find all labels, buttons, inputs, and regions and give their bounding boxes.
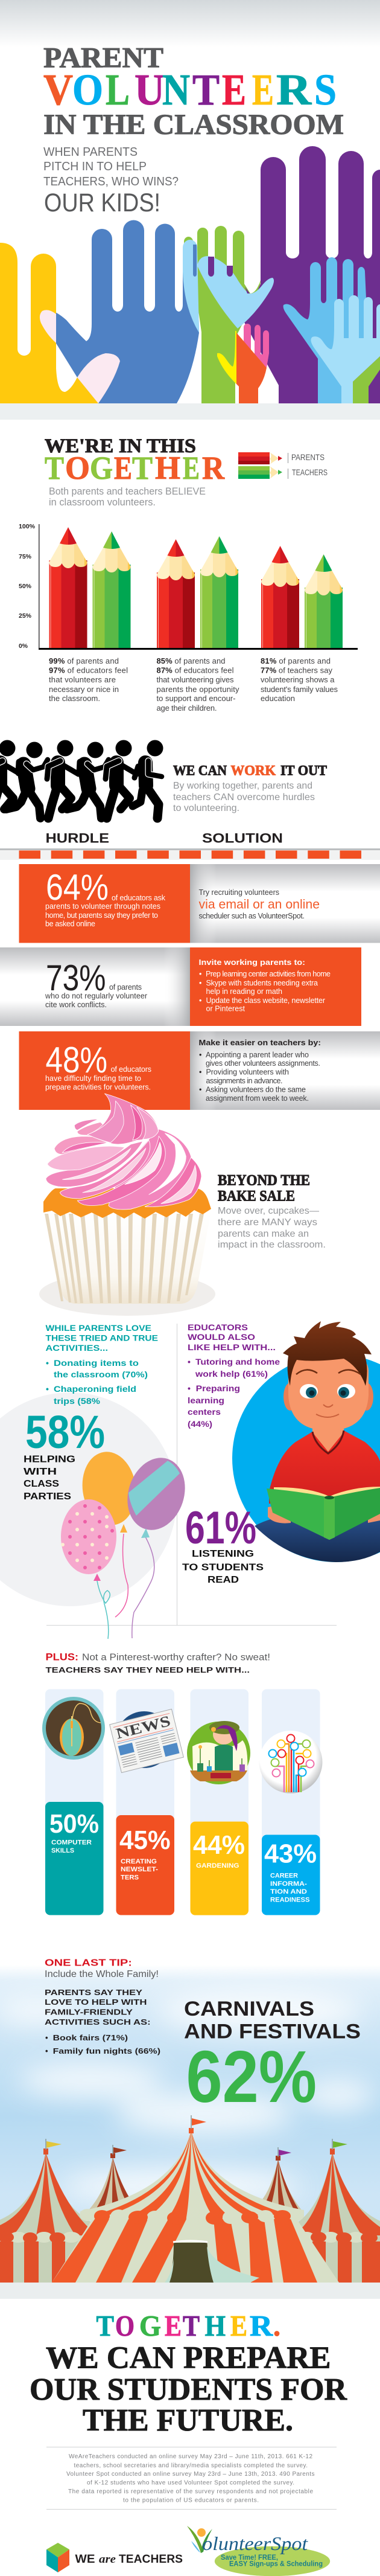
- pencil bar chart: [19, 524, 358, 650]
- chart caption 3: [261, 656, 338, 703]
- y axis labels: 0%: [19, 643, 28, 650]
- balloon: striped: [118, 1450, 194, 1538]
- stat: 58% helping with class parties: 58%: [25, 1406, 105, 1458]
- pencil: 81% parents: [261, 546, 299, 649]
- word: together: T: [97, 2309, 114, 2342]
- heading: plus: Not a Pinterest-worthy crafter? No sweat!: [82, 1653, 270, 1663]
- legend pencil: parents: [238, 452, 282, 464]
- educators list: •: [188, 1383, 191, 1393]
- heading: beyond the bake sale: [218, 1173, 310, 1204]
- family activities text: Book fairs (71%): [53, 2033, 128, 2042]
- chart caption 1: necessary or nice in: [49, 685, 119, 694]
- title word: volunteers: R: [276, 65, 312, 114]
- solution panel: email: [190, 864, 380, 943]
- parent activities list: Donating items to: [54, 1358, 139, 1368]
- icon: balloons: [61, 1448, 194, 1639]
- hurdle panel: 48%: 48%: [46, 1040, 107, 1080]
- heading: plus: TEACHERS SAY THEY NEED HELP WITH...: [46, 1666, 250, 1674]
- card: computer skills: [42, 1689, 105, 1915]
- solution panel: working parents: help in reading or math: [206, 987, 282, 996]
- stat: carnivals and festivals 62%: AND FESTIVALS: [184, 2020, 361, 2043]
- bake sale text: impact in the classroom.: [218, 1240, 326, 1250]
- legend: [238, 452, 328, 479]
- solution panel: easier on teachers: •: [199, 1086, 201, 1094]
- word: together: H: [205, 2309, 226, 2342]
- row 2: work conflicts: [0, 947, 361, 1026]
- door flap: [165, 2246, 259, 2283]
- chart caption 3: education: [261, 694, 295, 703]
- row 1: online requests: [19, 864, 380, 943]
- hurdle panel: 64%: home, but parents say they prefer to: [45, 911, 158, 920]
- blue circle: [232, 1354, 380, 1562]
- solution panel: working parents: •: [199, 996, 201, 1005]
- pencil: 97% educators: [93, 531, 130, 649]
- word: together: E: [230, 2309, 247, 2342]
- word: together: O: [115, 2309, 135, 2342]
- icon: computer mouse: [42, 1697, 105, 1760]
- hand: blue: [40, 220, 199, 403]
- subtitle: PITCH IN TO HELP: [43, 160, 147, 173]
- balloon: orange: [78, 1448, 141, 1533]
- tent: left: [0, 2139, 93, 2283]
- heading: we can work it out: [173, 763, 327, 778]
- stat: 58% helping with class parties: HELPING: [24, 1454, 75, 1465]
- work it out text: to volunteering.: [173, 803, 239, 813]
- heading: we're in this together: H: [155, 450, 180, 486]
- title word: volunteers: L: [106, 65, 130, 114]
- chart caption 2: that volunteering gives: [157, 675, 234, 684]
- shirt: [269, 1431, 380, 1504]
- educators list: work help (61%): [195, 1369, 268, 1379]
- icon: boy reading book: [232, 1321, 380, 1562]
- hand: small pink and orange: [217, 324, 269, 403]
- title word: volunteers: T: [192, 65, 220, 114]
- stat: 61% listening to students read: 61%: [185, 1502, 256, 1554]
- heading: one last tip: Include the Whole Family!: [45, 1969, 159, 1979]
- chart caption 2: 85% of parents and: [157, 656, 226, 665]
- cupcake shadow: [39, 1272, 215, 1316]
- cupcake frosting: [46, 1094, 201, 1210]
- solution panel: working parents: or Pinterest: [206, 1005, 245, 1013]
- parent activities list: THESE TRIED AND TRUE: [46, 1334, 158, 1343]
- word: together: [97, 2309, 280, 2342]
- stat: 61% listening to students read: TO STUDENTS: [182, 1563, 264, 1572]
- hand: yellow: [0, 243, 98, 403]
- bake sale text: Move over, cupcakes—: [218, 1206, 319, 1216]
- title word: volunteers: [43, 65, 337, 114]
- y axis labels: 50%: [19, 583, 31, 590]
- solution panel: working parents: Update the class website, newsletter: [206, 996, 325, 1005]
- chart caption 2: 87% of educators feel: [157, 665, 234, 675]
- heading: we're in this together: E: [114, 450, 132, 486]
- subtitle: [43, 146, 179, 217]
- hand: green: [184, 226, 261, 403]
- big top flag: [191, 2115, 192, 2129]
- tent: right: [298, 2139, 380, 2283]
- heading: we're in this together: E: [183, 450, 200, 486]
- y axis labels: 100%: [19, 524, 35, 530]
- icon: cupcake: [39, 1094, 215, 1316]
- solution panel: working parents: [190, 947, 361, 1026]
- heading: we can work it out: IT OUT: [280, 763, 327, 778]
- chart caption 1: the classroom.: [49, 694, 100, 703]
- logo: volunteerspot: Save Time! FREE,: [221, 2554, 278, 2562]
- solution panel: easier on teachers: gives other volunteers assignments.: [206, 1059, 320, 1068]
- tent: back left: [87, 2145, 135, 2211]
- y axis labels: [19, 524, 35, 650]
- survey methodology note: The data reported is representative of the survey respondents and not projectable: [68, 2488, 313, 2495]
- family activities text: FAMILY-FRIENDLY: [45, 2008, 133, 2017]
- title word: volunteers: E: [252, 65, 274, 114]
- logo: we are teachers: TEACHERS: [119, 2553, 183, 2566]
- logo: we are teachers: [46, 2543, 183, 2572]
- chart caption 2: to support and encour-: [157, 694, 235, 703]
- column headings: SOLUTION: [202, 831, 283, 845]
- chart caption 3: 77% of teachers say: [261, 665, 333, 675]
- solution panel: easier on teachers: Asking volunteers do the same: [206, 1086, 306, 1094]
- stat: 58% helping with class parties: PARTIES: [24, 1491, 71, 1502]
- work it out text: [173, 781, 315, 813]
- hurdle panel: 73%: of parents: [109, 983, 142, 992]
- intro text: in classroom volunteers.: [49, 496, 156, 508]
- eyes: [296, 1370, 361, 1399]
- heading: we're in this together: G: [90, 450, 113, 486]
- hurdle panel: 48%: [19, 1031, 190, 1110]
- pencil: 99% parents: [49, 527, 87, 649]
- closing headline: THE FUTURE.: [83, 2403, 293, 2438]
- chart caption 2: [157, 656, 239, 713]
- thumb overlaps: [40, 310, 120, 403]
- card: career information: CAREER: [270, 1872, 298, 1879]
- chart caption 3: volunteering shows a: [261, 675, 335, 684]
- hurdle panel: 73%: cite work conflicts.: [45, 1001, 107, 1009]
- closing headline: WE CAN PREPARE: [46, 2341, 331, 2376]
- parent activities list: the classroom (70%): [54, 1370, 148, 1379]
- y axis labels: 75%: [19, 554, 31, 560]
- heading: we're in this together: O: [65, 450, 90, 486]
- stat: 58% helping with class parties: [24, 1406, 105, 1502]
- pencil: 77% teachers: [305, 554, 343, 649]
- header background: [0, 0, 380, 420]
- heading: we're in this together: [45, 435, 225, 486]
- educators list: LIKE HELP WITH...: [188, 1343, 276, 1352]
- word: together: .: [273, 2309, 280, 2342]
- hurdle panel: 64%: parents to volunteer through notes: [45, 902, 160, 911]
- chart caption 1: 97% of educators feel: [49, 665, 128, 675]
- solution panel: easier on teachers: Appointing a parent leader who: [206, 1051, 309, 1059]
- hurdle panel: 64%: 64%: [46, 867, 109, 908]
- bake sale text: [218, 1206, 326, 1250]
- hand: pale blue: [183, 240, 274, 333]
- hurdle panel: 48%: have difficulty finding time to: [45, 1074, 141, 1083]
- heading: plus: [46, 1652, 270, 1674]
- ears: [283, 1383, 373, 1411]
- card: career information: [259, 1689, 322, 1915]
- y axis labels: 25%: [19, 613, 31, 620]
- educators list: learning: [188, 1395, 224, 1405]
- heading: beyond the bake sale: BAKE SALE: [218, 1188, 295, 1204]
- heading: beyond the bake sale: BEYOND THE: [218, 1173, 310, 1188]
- parent activities list: ACTIVITIES...: [46, 1344, 108, 1353]
- card: gardening: GARDENING: [196, 1862, 239, 1870]
- tent: back right: [261, 2147, 302, 2210]
- solution panel: email: scheduler such as VolunteerSpot.: [199, 912, 305, 920]
- pencil: 85% parents: [157, 539, 195, 649]
- heading: we're in this together: T: [45, 450, 64, 486]
- educators list: [188, 1323, 280, 1429]
- parent activities list: WHILE PARENTS LOVE: [46, 1324, 151, 1333]
- parent activities list: Chaperoning field: [54, 1384, 136, 1394]
- solution panel: easier on teachers: [190, 1031, 380, 1110]
- row 3: preparation time: [19, 1031, 380, 1110]
- heading: one last tip: ONE LAST TIP:: [45, 1958, 132, 1969]
- hand: purple: [244, 146, 380, 403]
- sky background: [0, 1965, 380, 2283]
- family activities text: LOVE TO HELP WITH: [45, 1998, 147, 2007]
- book: [267, 1487, 380, 1540]
- family activities text: PARENTS SAY THEY: [45, 1988, 143, 1997]
- legend pencil: teachers: [238, 466, 282, 479]
- parent activities list: [46, 1324, 158, 1406]
- family activities text: Family fun nights (66%): [53, 2046, 160, 2055]
- survey methodology note: WeAreTeachers conducted an online survey May 23rd – June 11th, 2013. 661 K-12: [69, 2453, 312, 2460]
- subtitle: TEACHERS, WHO WINS?: [43, 175, 179, 188]
- solution panel: easier on teachers: Make it easier on teachers by:: [199, 1038, 321, 1047]
- title: [43, 42, 344, 141]
- solution panel: email: Try recruiting volunteers: [199, 888, 279, 897]
- title word: volunteers: V: [43, 65, 73, 114]
- cupcake cake: [43, 1188, 211, 1219]
- stat: carnivals and festivals 62%: CARNIVALS: [184, 1998, 314, 2020]
- stat: 61% listening to students read: READ: [207, 1575, 239, 1585]
- title word: volunteers: N: [162, 65, 190, 114]
- tent: main big top: [52, 2115, 339, 2283]
- word: together: T: [183, 2309, 200, 2342]
- title: IN THE CLASSROOM: [43, 109, 344, 141]
- green wrist right: [353, 356, 380, 403]
- hair: [283, 1321, 372, 1386]
- work it out text: By working together, parents and: [173, 781, 312, 791]
- stat: 61% listening to students read: LISTENING: [192, 1549, 254, 1559]
- word: together: E: [165, 2309, 182, 2342]
- card: computer skills: SKILLS: [51, 1847, 74, 1854]
- word: together: R: [250, 2309, 273, 2342]
- educators list: Preparing: [196, 1383, 240, 1393]
- hands: [268, 1504, 380, 1523]
- logo: volunteerspot: [187, 2526, 330, 2576]
- card: gardening: 44%: [193, 1830, 245, 1860]
- solution panel: working parents: Skype with students needing extra: [206, 979, 318, 987]
- chart caption 3: 81% of parents and: [261, 656, 331, 665]
- logo: we are teachers: WE: [75, 2553, 95, 2566]
- solution panel: easier on teachers: assignment from week to week.: [206, 1094, 309, 1103]
- raised hands illustration: [0, 146, 380, 403]
- heading: one last tip: [45, 1958, 159, 1979]
- solution panel: easier on teachers: Providing volunteers with: [206, 1068, 289, 1076]
- finger gaps: [193, 245, 197, 277]
- chart caption 2: parents the opportunity: [157, 685, 239, 694]
- family activities text: ACTIVITIES SUCH AS:: [45, 2018, 151, 2027]
- legend: TEACHERS: [292, 468, 328, 477]
- card: creating newsletters: CREATING: [121, 1858, 157, 1865]
- survey methodology note: Volunteer Spot conducted an online survey May 23rd – June 13th, 2013. 490 Parents: [66, 2471, 315, 2478]
- jeans: [255, 1513, 380, 1562]
- card: creating newsletters: NEWSLET-: [121, 1866, 158, 1873]
- survey methodology note: of K-12 students who have used Volunteer Spot completed the survey.: [87, 2479, 294, 2487]
- card: creating newsletters: TERS: [121, 1874, 139, 1882]
- chart caption 1: [49, 656, 128, 703]
- balloon: polka dot: [61, 1499, 116, 1581]
- big top roof: [80, 2130, 304, 2217]
- card: career information: READINESS: [270, 1897, 310, 1904]
- title word: volunteers: O: [72, 65, 103, 114]
- hurdle panel: 48%: prepare activities for volunteers.: [45, 1083, 151, 1092]
- solution panel: easier on teachers: •: [199, 1068, 201, 1076]
- work it out text: teachers CAN overcome hurdles: [173, 792, 315, 803]
- neck: [312, 1426, 344, 1452]
- closing headline: OUR STUDENTS FOR: [30, 2373, 347, 2407]
- chart axes: [39, 524, 358, 650]
- hand: sky blue: [283, 257, 368, 403]
- bake sale text: there are MANY ways: [218, 1217, 317, 1228]
- legend: PARENTS: [291, 453, 325, 462]
- stat: carnivals and festivals 62%: 62%: [186, 2036, 317, 2118]
- hurdle panel: 64%: of educators ask: [112, 894, 166, 902]
- solution panel: working parents: •: [199, 979, 201, 987]
- illustration: circus tents: [0, 2115, 380, 2283]
- bake sale text: parents can make an: [218, 1229, 309, 1239]
- word: together: G: [139, 2309, 161, 2342]
- chart caption 1: that volunteers are: [49, 675, 116, 684]
- title word: volunteers: U: [135, 65, 165, 114]
- educators list: centers: [188, 1407, 221, 1417]
- heading: we can work it out: WORK: [230, 763, 276, 778]
- balloon strings: [97, 1534, 154, 1639]
- card: career information: INFORMA-: [270, 1880, 307, 1888]
- hurdle panel: 73%: [0, 947, 190, 1026]
- subtitle: OUR KIDS!: [44, 188, 160, 217]
- card: creating newsletters: 45%: [119, 1825, 170, 1855]
- survey methodology note: [46, 2447, 337, 2510]
- heading: we can work it out: WE CAN: [173, 763, 227, 778]
- stat: 61% listening to students read: [182, 1502, 264, 1585]
- parent activities list: trips (58%: [54, 1396, 101, 1406]
- column headings: [46, 831, 283, 845]
- logo: we are teachers: are: [99, 2553, 116, 2566]
- hurdle panel: 73%: who do not regularly volunteer: [45, 992, 147, 1000]
- solution panel: easier on teachers: •: [199, 1051, 201, 1059]
- heading: plus: PLUS:: [46, 1652, 78, 1663]
- tent door: [169, 2243, 214, 2283]
- solution panel: email: via email or an online: [199, 897, 320, 912]
- educators list: •: [188, 1357, 191, 1366]
- heading: we're in this together: R: [202, 450, 225, 486]
- chart caption 3: student's family values: [261, 685, 338, 694]
- column headings: HURDLE: [46, 831, 109, 845]
- hurdle panel: 48%: of educators: [111, 1065, 151, 1074]
- parent activities list: •: [46, 1358, 49, 1368]
- title word: volunteers: S: [314, 65, 337, 114]
- hurdle panel: 73%: 73%: [46, 958, 106, 998]
- icon: newspaper: NEWS: [115, 1713, 172, 1742]
- survey methodology note: to the population of US educators or parents.: [123, 2498, 259, 2504]
- closing headline: [30, 2309, 347, 2438]
- hand: lightest blue: [311, 295, 380, 403]
- hurdle track divider: [0, 848, 380, 860]
- hurdle panel: 64%: be asked online: [45, 920, 95, 928]
- cupcake wrapper: [43, 1211, 211, 1304]
- stat: 58% helping with class parties: CLASS: [24, 1479, 59, 1489]
- card: computer skills: COMPUTER: [51, 1839, 92, 1847]
- icon: running figures: [0, 740, 163, 818]
- educators list: EDUCATORS: [188, 1323, 248, 1332]
- educators list: (44%): [188, 1419, 212, 1429]
- parent activities list: •: [46, 1384, 49, 1394]
- logo: volunteerspot: EASY Sign-ups & Scheduling: [229, 2560, 323, 2568]
- solution panel: working parents: Invite working parents to:: [199, 958, 305, 967]
- educators list: Tutoring and home: [195, 1357, 280, 1366]
- educators list: WOULD ALSO: [188, 1333, 255, 1342]
- solution panel: working parents: Prep learning center activities from home: [206, 970, 331, 978]
- card: computer skills: 50%: [49, 1809, 99, 1839]
- card: gardening: [187, 1689, 250, 1915]
- stat: carnivals and festivals 62%: [184, 1998, 361, 2118]
- face: [288, 1353, 369, 1431]
- heading: we're in this together: WE'RE IN THIS: [45, 435, 196, 457]
- stat: 58% helping with class parties: WITH: [24, 1467, 57, 1477]
- panel: parent activities background circle: [0, 1392, 177, 1606]
- family activities text: [45, 1988, 160, 2055]
- pencil: 87% educators: [200, 536, 238, 649]
- icon: career tree: [259, 1731, 322, 1793]
- chart caption 2: age their children.: [157, 703, 217, 713]
- family activities text: •: [45, 2033, 48, 2042]
- solution panel: easier on teachers: assignments in advance.: [206, 1077, 282, 1085]
- intro text: Both parents and teachers BELIEVE: [49, 485, 206, 497]
- big top drape: [52, 2217, 339, 2283]
- title: PARENT: [43, 42, 163, 74]
- title word: volunteers: E: [222, 65, 246, 114]
- ground band: [0, 2283, 380, 2299]
- family activities text: •: [45, 2046, 48, 2055]
- hurdle panel: 64%: [19, 864, 190, 943]
- intro text: [49, 485, 206, 508]
- subtitle: WHEN PARENTS: [43, 146, 138, 159]
- panel: divider lines: [46, 1324, 337, 1626]
- icon: gardener: [187, 1721, 250, 1784]
- survey methodology note: teachers, school secretaries and library/media specialists completed the survey.: [74, 2462, 308, 2469]
- heading: we're in this together: T: [132, 450, 153, 486]
- big top valance: [80, 2209, 304, 2225]
- card: career information: 43%: [264, 1839, 317, 1868]
- card: creating newsletters: [110, 1689, 183, 1915]
- solution panel: working parents: •: [199, 970, 201, 978]
- icon: newspaper: [110, 1709, 183, 1773]
- card: career information: TION AND: [270, 1888, 307, 1895]
- nose and mouth: [316, 1405, 339, 1417]
- chart caption 1: 99% of parents and: [49, 656, 119, 665]
